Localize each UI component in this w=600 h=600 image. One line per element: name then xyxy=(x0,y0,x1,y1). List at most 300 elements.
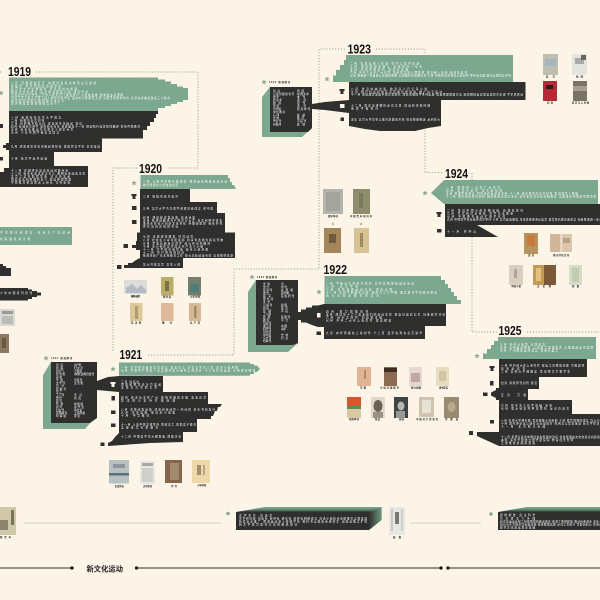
1925 green summary block xyxy=(483,337,596,359)
table text: 民铎 xyxy=(297,122,305,126)
1923 green summary block: 七月 国语统一筹备会公布课程纲要 全国推行白话教科书 十月 中国青年周刊在上海创刊 恽代英主编 面向全国青年宣传 xyxy=(350,74,511,78)
1923 dark events block xyxy=(312,82,526,131)
1922 dark events block: 六月 诗杂志创刊 刘延陵主编 xyxy=(326,316,382,320)
1923 green summary block: 二月 张君劢讲人生观 科学与玄学论战 xyxy=(350,62,419,66)
image: tan dark cover xyxy=(324,228,341,253)
icon: square marker xyxy=(100,442,104,446)
image: light cover: 中国共产党宣言 xyxy=(416,417,439,421)
1919 dark events block xyxy=(0,111,158,187)
heading: 1923: 1923 xyxy=(348,42,371,56)
1919 green summary block: 胡适发表多研究些问题少谈主义 xyxy=(11,99,64,103)
1924 dark events block: 三月 古史辨讨论持续 史学方法更新 xyxy=(447,211,513,215)
table text: 时事报 xyxy=(56,414,66,418)
heading: 1924: 1924 xyxy=(445,167,468,181)
green 3D backing xyxy=(262,87,312,137)
icon: marker dot xyxy=(226,512,230,515)
icon: square marker xyxy=(490,381,494,386)
1919 dark events block: 三月 林纾致书蔡元培 攻击新文化运动 复信 xyxy=(11,121,82,125)
1924 green summary block: 五月 黄埔军校成立 周恩来任政治部主任 十一月 语丝周刊在北京创刊 鲁迅周作人撰稿 xyxy=(446,192,578,196)
dark stepped fragment xyxy=(0,264,11,276)
table text: 新空气 xyxy=(56,369,64,373)
1923 green summary block: 三月 胡适陈独秀参与 论战持续一年余 xyxy=(350,65,422,69)
heading: 1921: 1921 xyxy=(120,348,142,362)
1921 dark events block: 十一月 上海平民女校筹办 招收女工 提倡女子教育 xyxy=(121,423,196,427)
image: grey newspaper: 国学季刊 xyxy=(328,214,339,218)
1921 green summary block: 一月 文学研究会在北京成立 发表宣言 主张文学为人生 改革小说月报 xyxy=(121,365,238,369)
table text: 工人刊 xyxy=(56,393,64,397)
table text: 国学 xyxy=(273,95,279,99)
1920 green summary block xyxy=(140,175,236,189)
table text: 生活报 xyxy=(74,381,83,385)
1924 green summary block xyxy=(431,180,598,204)
icon: white square marker xyxy=(317,313,320,318)
image group: 1920 publications xyxy=(124,277,201,324)
1924 dark events block: 十一月 孙中山 xyxy=(447,229,476,233)
table label: 1923 新创期刊 xyxy=(269,80,291,84)
icon: square marker xyxy=(111,410,116,414)
1922 dark events block xyxy=(298,304,446,339)
1920 dark events block: 四月 胡适尝试集出版 白话诗集 xyxy=(143,216,195,220)
heading: 1925: 1925 xyxy=(498,324,522,338)
table text: 新声 xyxy=(281,306,288,310)
table text: 星期 xyxy=(263,309,271,313)
table text: 评论 xyxy=(74,414,80,418)
right dark bar with green top: 思想解放 民主科学 xyxy=(500,513,535,517)
image group: 1923 publications right xyxy=(543,54,590,104)
1923 green summary block xyxy=(333,55,513,82)
image group: 1921 publications xyxy=(109,460,210,488)
1921 dark events block: 主张为艺术而艺术 xyxy=(121,386,157,390)
1922 green summary block: 二月 北京学生 xyxy=(326,285,358,289)
1925 dark events block: 十一月 北京民众示威 xyxy=(501,424,545,428)
1925 dark events block: 一月 中共四大在上海召开 提出工农联盟问题 京报副刊 xyxy=(501,363,584,367)
table text: 新民 xyxy=(263,306,269,310)
dark table panel xyxy=(270,87,312,132)
icon: square marker xyxy=(0,157,3,160)
1924 green summary block: 四月 泰戈尔访华 徐志摩陪同 xyxy=(446,189,502,193)
table text: 中华报 xyxy=(263,333,271,337)
image group: 1923 publications centre xyxy=(323,189,373,253)
1919 dark events block: 十一月 星期评论发表劳动问题专论 xyxy=(11,168,68,172)
table text: 浅草 xyxy=(297,104,306,108)
green summary fragment xyxy=(0,227,72,245)
panel: 1919 xyxy=(0,65,188,187)
table text: 今日 xyxy=(281,318,288,322)
green 3D backing xyxy=(248,280,298,352)
table text: 月刊 xyxy=(297,101,305,105)
1922 green summary block: 三月 非基督教运动兴起 通电全国 xyxy=(326,288,392,292)
table text: 中国青年 xyxy=(297,92,309,96)
icon: shirt marker xyxy=(490,366,494,371)
image: brown yellow cover: 古史辨 xyxy=(537,284,552,288)
axis title: 新文化运动 xyxy=(86,564,123,574)
image: old newspaper left: 新青年 xyxy=(0,535,12,539)
1920 dark events block: 毛泽东在长沙创办文化书社 传播新思想 销售书刊 xyxy=(143,222,222,226)
table text: 前驱报 xyxy=(74,402,83,406)
table text xyxy=(273,89,310,126)
1922 dark events block: 四月 努力周报创刊 xyxy=(326,309,368,313)
1923 dark events block: 八月 鲁迅呐喊出版 收录狂人日记等小说 xyxy=(351,87,427,91)
image: beige cover: 少年中国 xyxy=(197,483,207,487)
table text: 共产党 xyxy=(74,363,81,367)
1919 green summary block: 五月四日北京学生三千余人在天安门集会游行 火烧赵家楼 要求惩办卖国贼 xyxy=(11,93,123,97)
table text: 学生刊 xyxy=(273,119,281,123)
1925 dark events block: 七月 章士钊复刊甲寅周刊 反对白话文 xyxy=(501,407,569,411)
icon: white square marker xyxy=(340,104,344,108)
table text: 创造 xyxy=(273,89,280,93)
image: dark brown cover: 小说月报新号 xyxy=(380,386,400,390)
1923 green summary block: 五月 创造周报创刊 成仿吾主编 xyxy=(350,68,408,72)
table text: 诗 xyxy=(281,282,284,286)
icon: square marker xyxy=(316,332,321,335)
table text: 中国 xyxy=(281,324,287,328)
table text: 新教育 xyxy=(56,387,66,391)
bottom dark bar with green top: 新文学成为现代文化的组成部分 xyxy=(239,523,297,527)
1922 green summary block xyxy=(324,276,461,304)
1920 dark events block: 陈独秀赴广东主持教育工作 蔡元培赴欧美考察 高校教师索薪 xyxy=(143,253,233,257)
icon: star xyxy=(422,190,428,196)
image: grey cover: 科学 xyxy=(546,74,556,78)
1923 dark events block: 九月 陶行知发起中华平民教育促进会 推广识字运动 xyxy=(351,90,442,94)
image: dark grey brown cover: 科学与人生观 xyxy=(572,100,590,104)
table text: 孤军 xyxy=(263,294,271,298)
table text: 新潮 xyxy=(263,315,270,319)
bottom dark bar with green top: 文学革命 白话文 xyxy=(239,513,272,517)
bottom dark bar with green top: 新式标点推广 国语运动深入各级学校 教科书全面改用语体文 出版业随之扩张 xyxy=(239,520,367,524)
timeline connector: dotted path linking the years xyxy=(0,49,600,355)
table text: 先驱 xyxy=(56,375,62,379)
image: peach cover: 学衡 xyxy=(360,386,367,390)
table text: 先驱报 xyxy=(281,288,293,292)
1925 dark events block xyxy=(477,359,600,446)
table text: 晨报 xyxy=(281,303,287,307)
icon: square marker xyxy=(437,229,442,232)
image: portrait: 鲁迅 xyxy=(375,417,381,421)
icon: square marker xyxy=(469,431,473,435)
table text: 时事刊 xyxy=(263,339,271,343)
heading: 1922: 1922 xyxy=(324,263,347,277)
image: white pink cover: 努力周报 xyxy=(411,386,422,390)
right dark bar with green top: 现代文化由此奠定基础 xyxy=(500,525,535,529)
table text: 民国副刊 xyxy=(56,411,67,415)
1923 dark events block: 地质学会刊行 xyxy=(351,107,378,111)
table text: 努力 xyxy=(263,285,269,289)
connector line xyxy=(24,522,221,524)
image: light green cover: 前锋 xyxy=(572,284,580,288)
1919 green summary block: 陈独秀 李大钊创办每周评论 xyxy=(11,84,61,88)
1919 dark events block: 九月 周恩来等在天津组织觉悟社 提倡男女平等 主张改造 xyxy=(11,144,100,148)
table text: 妇女刊 xyxy=(56,408,64,412)
image: orange brown cover: 语丝 xyxy=(528,253,535,257)
1921 dark events block: 十二月 中国哲学史大纲再版 国故讨论 xyxy=(121,435,181,439)
1925 dark events block: 六月 孙文主义哲学基础 论争 xyxy=(501,404,552,408)
1920 dark events block: 恽代英创办利群书社 xyxy=(143,225,178,229)
table text: 觉悟 xyxy=(263,291,269,295)
1919 dark events block: 十二月 新青年发表本志宣言 阐明社会改造主张 xyxy=(11,171,85,175)
table text: 新妇女 xyxy=(74,408,82,412)
1919 dark events block: 十月 新文学丛书选辑 xyxy=(11,156,47,160)
icon: shirt marker xyxy=(340,89,344,94)
panel: 1924 xyxy=(422,167,600,288)
1923 dark events block: 十一月 梁启超等发起中国文化研究 胡适主编国学季刊出版 提出整理国故方法 顾颉刚提出层累造成的古史观 学术界震动 xyxy=(351,93,523,97)
table text: 小说月报新专号 xyxy=(273,92,294,96)
1925 dark events block: 五月 京报 xyxy=(501,393,526,397)
1920 dark events block: 十月 李大钊在北京成立共产主义小组 xyxy=(143,245,203,249)
table text: 学灯 xyxy=(74,393,82,397)
1919 green summary block: 国民杂志社成立 主张增进国民人格 研究学术 xyxy=(11,90,88,94)
table text: 前锋 xyxy=(273,101,281,105)
1920 green summary block: 教育部通令小学改用白话 xyxy=(143,183,178,187)
icon: shirt marker xyxy=(436,212,442,217)
1923 periodical table xyxy=(261,79,312,137)
1921 dark events block: 九月 沉沦出版 郁达夫小说集 xyxy=(121,410,175,414)
right dark bar with green top: 马克思主义传播 xyxy=(500,516,535,520)
panel: left fragment 1919 continued xyxy=(0,227,72,353)
1919 green summary block: 李大钊发表再论问题与主义 xyxy=(11,102,57,106)
1919 green summary block xyxy=(9,78,188,111)
1924 dark events block: 七月 平民教育运动扩展至农村 xyxy=(447,214,505,218)
1922 periodical table xyxy=(248,274,298,352)
image: tan cover with title: 共产党 xyxy=(190,320,201,324)
image: light cover: 中国小说 xyxy=(511,284,522,288)
bottom dark bar with green top: 文学研究会 创造社 新月社 语丝社 莽原社相继成立 白话小说新诗话剧散文全面发展 xyxy=(239,517,367,521)
image: olive cover: 新社会 xyxy=(163,294,172,298)
image: tan cover: 诗歌选 xyxy=(445,417,459,421)
dark arrow block: 少年中国月刊创刊 xyxy=(0,291,32,295)
1920 dark events block: 北大开放女禁 女生入校 xyxy=(143,262,180,266)
heading: 1919: 1919 xyxy=(8,65,31,79)
1921 dark events block: 鲁迅阿Q正传开始连载 xyxy=(121,399,175,403)
1920 dark events block: 十二月 共产党月刊创办 xyxy=(143,251,184,255)
image: brown cover: 学灯 xyxy=(171,484,178,488)
icon: square marker xyxy=(132,220,136,224)
1921 green summary block: 七月 中国共产党第一次全国代表大会在上海召开 十三名代表出席 大会通过纲领 xyxy=(121,369,255,373)
table text: 工人报 xyxy=(263,312,271,316)
image: brown cover xyxy=(0,334,9,353)
table text: 新民 xyxy=(74,396,81,400)
icon: white shirt marker xyxy=(110,382,116,387)
table text: 弥洒 xyxy=(273,104,279,108)
1925 dark events block: 四月 莽原周刊创刊 鲁迅 xyxy=(501,381,537,385)
icon: square marker xyxy=(0,124,3,128)
icon: square marker xyxy=(111,424,116,427)
image: beige cover: 读书杂志 xyxy=(439,386,449,390)
table text: 史地 xyxy=(273,116,279,120)
image: white newspaper: 呐喊 xyxy=(576,74,584,78)
table text: 科学刊 xyxy=(263,327,271,331)
1920 dark events block xyxy=(124,189,235,268)
table text: 现代评 xyxy=(263,297,273,301)
icon: square marker xyxy=(124,244,128,248)
bottom dark bar with green top xyxy=(236,507,382,530)
table text: 平民刊 xyxy=(297,119,306,123)
1919 green summary block: 六月三日上海工人罢工商人罢市声援学生 运动中心转移至上海 全国百余城市响应 北洋政府被迫罢免三人职务 xyxy=(11,96,170,100)
icon: square marker xyxy=(340,118,344,121)
table text: 新潮 xyxy=(56,402,63,406)
table text: 诗学 xyxy=(56,384,64,388)
icon: star xyxy=(332,222,334,225)
1920 dark events block: 七月 直皖战争爆发 时局动荡 xyxy=(143,235,193,239)
1925 dark events block: 青年必读书 xyxy=(501,366,525,370)
1924 dark events block xyxy=(445,204,600,237)
panel: 1923 xyxy=(261,42,590,253)
table text: 平民刊 xyxy=(74,378,82,382)
1921 dark events block: 八月 女神诗集出版 郭沫若新诗开一代诗风 泰东书局发行 xyxy=(121,407,215,411)
1922 green summary block: 十一月 壬戌学制颁布实施 采用六三三学制 确立现代学校教育制度 xyxy=(326,291,437,295)
image: dark portrait: 胡适 xyxy=(399,417,405,421)
1921 dark events block: 四月 新青年迁往广州 陈独秀继续主编 发表论文 xyxy=(121,395,206,399)
1919 green summary block: 北京大学学生傅斯年 罗家伦创办新潮 xyxy=(11,87,77,91)
1921 periodical table xyxy=(43,355,97,429)
icon: shirt marker xyxy=(132,194,136,199)
1920 green summary block: 一月 全国学生联合会通电 要求政府拒绝直接交涉 xyxy=(143,180,227,184)
image: red cover: 向导 xyxy=(547,100,554,104)
icon: star xyxy=(131,180,137,186)
image: newspaper centre: 晨报 xyxy=(393,535,402,539)
icon: square marker xyxy=(117,265,122,269)
table text: 青年 xyxy=(281,327,286,331)
icon: star xyxy=(360,222,362,225)
table text: 心理 xyxy=(273,113,279,117)
table text: 新学制 xyxy=(281,291,289,295)
1919 green summary block: 一月 巴黎和会召开 中国代表提出收回山东权益 xyxy=(11,81,96,85)
1922 dark events block: 七月 中共二大在上海召开 提出纲领 xyxy=(326,319,391,323)
table text: 民权周刊 xyxy=(281,294,294,298)
icon: square marker xyxy=(112,396,115,400)
table text: 晨光 xyxy=(56,399,62,403)
icon: square marker xyxy=(483,392,488,396)
panel: 1920 xyxy=(117,162,236,324)
green summary fragment: 学生联合会成立 白话文广泛使用 xyxy=(0,231,70,235)
table text: 新月季刊 xyxy=(297,107,310,111)
table text: 创造 xyxy=(56,363,63,367)
green 3D backing xyxy=(43,362,97,429)
1921 green summary block xyxy=(119,362,260,376)
table text: 向导 xyxy=(281,285,287,289)
1921 dark events block xyxy=(97,376,222,446)
table text: 妇女 xyxy=(281,336,288,340)
dark table panel xyxy=(51,362,97,423)
table text: 劳工 xyxy=(56,390,62,394)
1923 dark events block: 本年 北京大学宣布与教育部脱离关系 抗议曹锟贿选 反响甚大 xyxy=(351,117,440,121)
1919 dark events block: 北京工读互助团筹备 王光祈发起 xyxy=(11,175,70,179)
1921 dark events block: 孟禄来华考察教育 xyxy=(121,426,158,430)
table text: 民国刊 xyxy=(281,315,290,319)
1922 dark events block: 九月 向导周报在上海创刊 十二月 爱罗先珂在北京讲学 xyxy=(326,331,422,335)
footer axis: 新文化运动 xyxy=(0,564,600,574)
1920 dark events block: 二月 陈独秀离京赴沪 xyxy=(143,194,178,198)
1919 dark events block: 一月 新潮社在北京大学成立 xyxy=(11,115,61,119)
image: green brown cover: 少年世界 xyxy=(190,294,201,298)
image: two tan pages: 现代评论合刊 xyxy=(553,253,570,257)
table text: 劳动刊 xyxy=(263,321,271,325)
table text: 上海周报 xyxy=(74,411,85,415)
table text: 觉悟 xyxy=(56,396,62,400)
icon: marker xyxy=(490,420,494,424)
image: newspaper cover xyxy=(0,309,15,326)
table text: 新学报 xyxy=(56,372,65,376)
1922 green summary block: 蔡元培提出教育独立议 xyxy=(326,294,379,298)
1925 dark events block: 王国维梁启超陈寅恪 xyxy=(501,441,535,445)
1925 green summary block: 五月 五卅运动爆发 上海罢工罢课罢市 全国掀起反帝爱国 xyxy=(500,346,593,350)
panel: bottom continuation row xyxy=(0,507,600,539)
table text: 时事评 xyxy=(273,122,281,126)
image: old newspaper left xyxy=(0,507,16,539)
1924 dark events block: 二月 鲁迅中国小说史略出版 新潮社印行 xyxy=(447,208,523,212)
1924 green summary block: 十二月 现代评论周刊创刊 胡适陈源王世杰主办 新文化阵营分化日趋明显 全国进步刊物增至数百种 xyxy=(446,195,596,199)
image: landscape print: 解放与改造 xyxy=(131,294,141,298)
right dark bar with green top xyxy=(498,507,600,530)
table text: 文学 xyxy=(263,300,270,304)
1925 dark events block: 二月 女师大学潮爆发 鲁迅撰文声援学生 xyxy=(501,369,570,373)
icon: star xyxy=(324,76,330,82)
image group: 1922 publications xyxy=(347,367,459,421)
image: orange green cover: 创造季刊 xyxy=(349,417,360,421)
table text: 妇女声 xyxy=(74,366,83,370)
table text: 中华教育 xyxy=(273,110,285,114)
table text xyxy=(263,282,294,343)
table text: 周报 xyxy=(297,89,304,93)
table text: 语丝 xyxy=(297,98,306,102)
1923 green summary block: 六月 中共三大在广州召开 决定党员加入国民党 建立统一战线 新青年复刊 xyxy=(350,71,467,75)
table text: 哲学评 xyxy=(263,330,271,334)
image: newspaper centre xyxy=(389,507,405,539)
1920 dark events block: 十一月 文学研究会筹备 改革小说月报 xyxy=(143,248,208,252)
1920 dark events block: 三月 北京大学马克思学说研究会成立 邓中夏 xyxy=(143,206,213,210)
1919 dark events block: 五月 新青年推出马克思主义研究专号 xyxy=(11,127,73,131)
table text: 平民 xyxy=(281,309,288,313)
1921 dark events block: 郭沫若郁达夫东京发起 xyxy=(121,383,161,387)
1919 dark events block: 胡适发表新思潮的意义 提出整理国故 xyxy=(11,178,71,182)
image: tan cover: 劳动界 xyxy=(131,320,142,324)
table text: 小说报 xyxy=(74,369,82,373)
table text: 学衡 xyxy=(56,378,63,382)
table text: 学衡 xyxy=(263,282,270,286)
1919 dark events block: 四月 杜威来华讲学 前后两年有余 足迹遍及十一省 胡适陶行知等陪同翻译 影响中国教育 xyxy=(11,124,140,128)
1925 dark events block: 本年 清华学校成立国学研究院 聘请四大导师 xyxy=(501,438,573,442)
icon: star xyxy=(0,90,4,96)
panel: 1921 xyxy=(43,348,260,488)
icon: star xyxy=(474,353,480,358)
image: grey blue cover: 妇女杂志 xyxy=(115,484,125,488)
1919 dark events block: 七月 少年中国学会正式成立 xyxy=(11,130,59,134)
1922 green summary block: 一月 学衡杂志在南京创刊 倡导昌明国粹融化新知 xyxy=(326,281,414,285)
table text: 中国妇女联合会刊 xyxy=(74,372,94,376)
table text xyxy=(56,363,94,418)
table text: 文学报 xyxy=(273,107,281,111)
heading: 1920: 1920 xyxy=(139,162,162,176)
1919 dark events block: 平民教育讲演团走上街头 宣传新知 xyxy=(11,181,70,185)
table text: 史地 xyxy=(281,333,288,337)
table text: 教育 xyxy=(297,116,304,120)
panel: 1922 xyxy=(248,263,461,421)
1922 dark events block: 五月 胡适等十六人发表我们的政治主张 提出好政府口号 社会展开讨论 xyxy=(326,313,445,317)
1923 dark events block: 十二月 鲁迅演讲娜拉走后怎样 提出经济权问题 xyxy=(351,104,430,108)
image: olive cover: 中国青年创刊号 xyxy=(350,214,373,218)
1921 dark events block: 三月 创造社 xyxy=(121,380,139,384)
image: tan cover xyxy=(354,228,369,253)
dark table panel xyxy=(256,280,298,345)
panel: 1925 xyxy=(469,324,600,446)
image: pink tan cover: 曙光 xyxy=(162,320,173,324)
table label: 1922 新创期刊 xyxy=(257,275,278,279)
icon: star xyxy=(316,289,322,294)
1920 dark events block: 八月 社会主义青年团发起 新青年改组为机关刊物 xyxy=(143,238,223,242)
icon: square marker xyxy=(132,206,136,210)
1925 green summary block: 三月 孙中山逝世 全国悼念 xyxy=(500,343,545,347)
1925 green summary block: 七月 广州国民政府成立 省港大罢工 xyxy=(500,349,558,353)
1921 dark events block: 十月 中华教育 xyxy=(121,413,149,417)
